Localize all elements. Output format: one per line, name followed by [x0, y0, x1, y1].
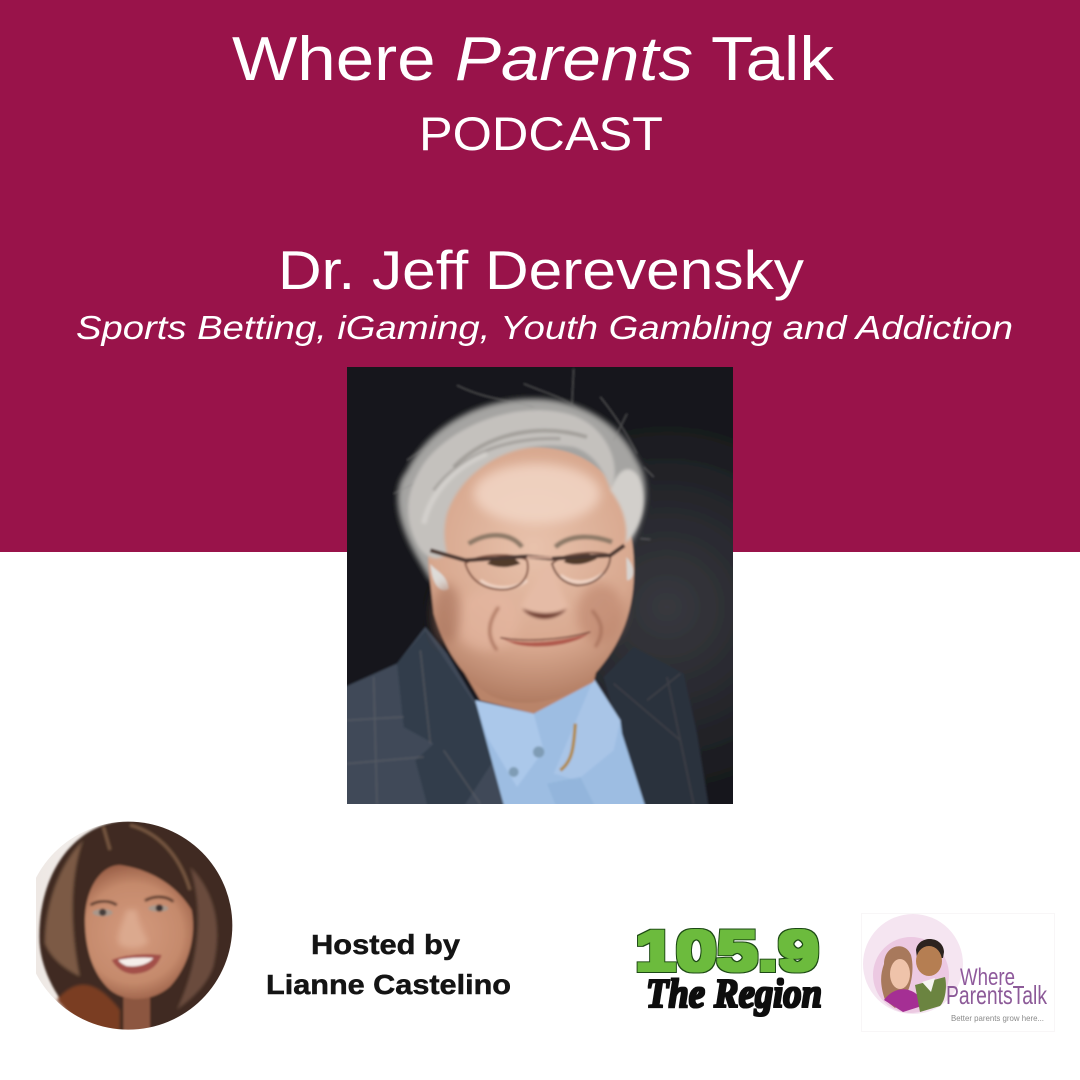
- jacket left: [347, 626, 504, 804]
- brows: [469, 535, 522, 547]
- logo man: [916, 939, 944, 958]
- logo wordmark: Where: [960, 964, 1015, 991]
- face: [428, 447, 634, 703]
- guest name: Dr. Jeff Derevensky: [278, 239, 805, 301]
- face: [85, 865, 193, 999]
- mouth: [502, 634, 589, 647]
- logo: 105.9 The Region: [635, 919, 822, 1016]
- eye bags: [480, 580, 527, 588]
- hosted by caption: [266, 929, 511, 1000]
- eyes: [487, 556, 520, 567]
- sideburn hair: [430, 564, 449, 590]
- host photo backdrop: [36, 824, 106, 1008]
- neck: [122, 996, 152, 1030]
- forehead highlight: [474, 464, 600, 524]
- subtitle: PODCAST: PODCAST: [419, 107, 663, 160]
- stray hairs: [394, 369, 654, 539]
- neck: [463, 672, 598, 715]
- logo circles: [863, 914, 963, 1014]
- hosted by caption: Hosted by: [311, 929, 460, 960]
- hair top light: [408, 410, 615, 558]
- logo: Where Parents Talk: Better parents grow here...: [951, 1013, 1044, 1023]
- nose: [118, 910, 148, 948]
- title: Where Parents Talk: Where Parents Talk: [232, 25, 835, 94]
- glasses: [430, 545, 624, 590]
- hosted by caption: Lianne Castelino: [266, 969, 511, 1000]
- logo: 105.9 The Region: The Region: [646, 970, 822, 1016]
- brows: [91, 901, 117, 905]
- logo woman: [881, 946, 913, 1008]
- hair: [39, 820, 237, 1036]
- shirt: [475, 682, 646, 804]
- smile line: [490, 607, 499, 650]
- mouth: [112, 954, 162, 974]
- logo: Where Parents Talk: [862, 914, 1054, 1032]
- logo: Where Parents Talk: ParentsTalk: [946, 980, 1048, 1010]
- jacket right: [604, 658, 709, 804]
- back hair: [398, 399, 645, 580]
- host portrait photo: [36, 817, 240, 1037]
- cheek and nose shading: [458, 604, 510, 650]
- shirt buttons: [533, 746, 544, 758]
- necklace: [560, 724, 575, 770]
- episode topic: Sports Betting, iGaming, Youth Gambling and Addiction: [76, 309, 1013, 346]
- logo: 105.9 The Region: 105.9: [635, 919, 819, 982]
- maroon header band: [0, 0, 1080, 552]
- eyes: [93, 909, 113, 916]
- guest portrait photo: [347, 367, 733, 804]
